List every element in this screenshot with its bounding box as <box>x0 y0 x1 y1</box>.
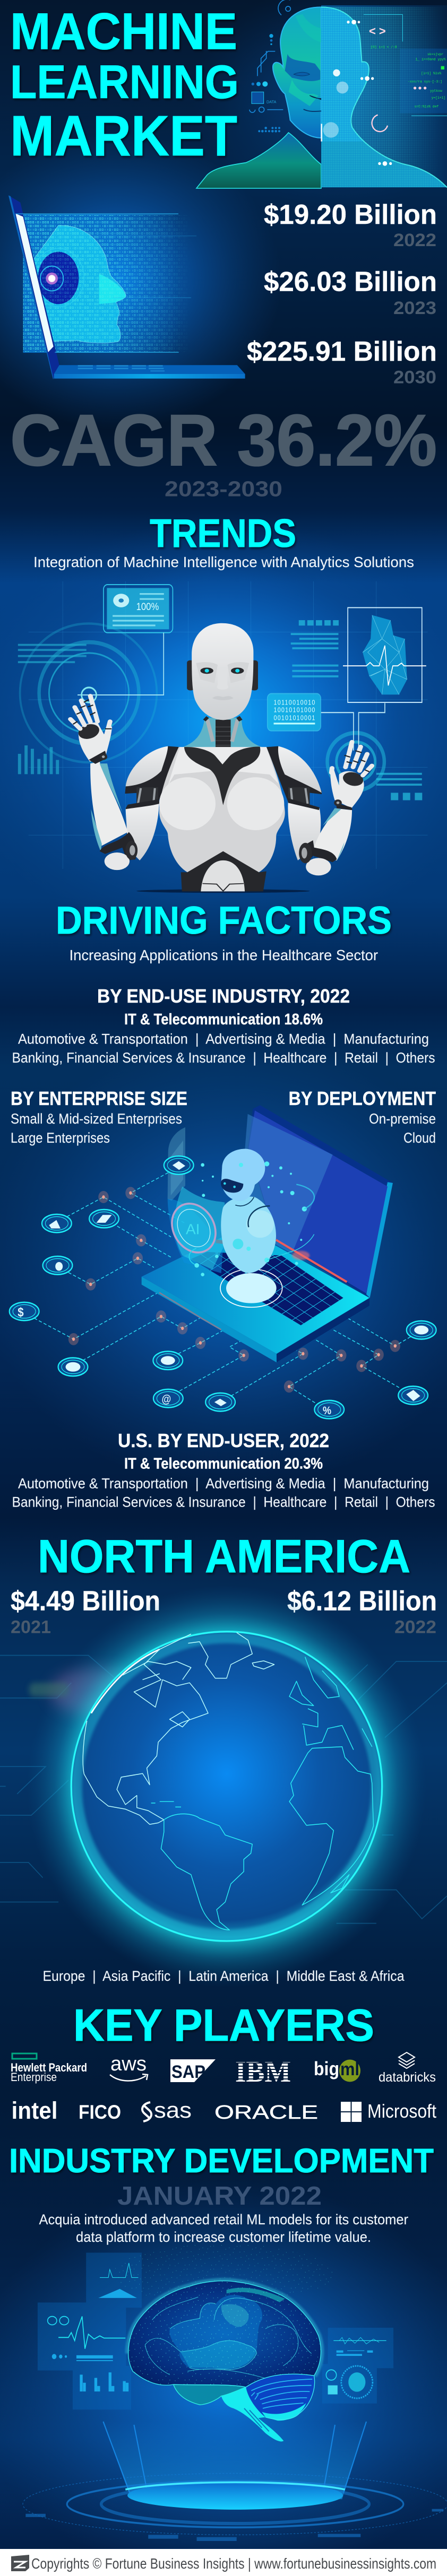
illustration: half human half digital head: < > <box>369 24 386 38</box>
platform <box>23 2473 447 2541</box>
illustration: half human half digital head: [0] i+1 < /:8 <box>371 45 397 49</box>
logo: IBM: IBM <box>235 2056 291 2088</box>
logo: Microsoft <box>341 2100 436 2122</box>
illustration: humanoid robot <box>71 623 372 893</box>
leading segment: IT & Telecommunication 20.3% <box>124 1456 323 1473</box>
line 2: data platform to increase customer lifetime value. <box>76 2229 371 2245</box>
robot arm right <box>288 742 372 875</box>
illustration: laptop with digital face <box>8 195 245 379</box>
development date: JANUARY 2022 <box>117 2182 322 2211</box>
logo: Hewlett Packard Enterprise: Enterprise <box>11 2070 57 2084</box>
value: $225.91 Billion <box>247 336 437 367</box>
illustration: half human half digital head: yytkxw <box>430 89 442 93</box>
leading segment: IT & Telecommunication 18.6% <box>124 1011 323 1028</box>
illustration: half human half digital head: y=[i+1] <box>432 96 445 100</box>
segments line 1: Automotive & Transportation | Advertising & Media | Manufacturing <box>18 1476 429 1492</box>
logo: Hewlett Packard Enterprise: Hewlett Packard <box>11 2061 87 2074</box>
network icons: @ <box>161 1393 171 1406</box>
laptop screen <box>239 1105 393 1298</box>
logo: Databricks: databricks <box>379 2070 436 2085</box>
footer logo <box>11 2555 29 2571</box>
subheading: BY ENTERPRISE SIZE <box>11 1087 187 1109</box>
segment 2: Cloud <box>403 1130 436 1146</box>
CAGR figure: CAGR 36.2% <box>10 400 437 481</box>
value: $6.12 Billion <box>287 1586 437 1617</box>
heading: North America: NORTH AMERICA <box>38 1530 410 1582</box>
segment 2: Large Enterprises <box>11 1130 110 1146</box>
stat: 2022 market size <box>264 199 437 250</box>
logo: Intel: intel <box>12 2097 57 2124</box>
cerebellum <box>246 2374 315 2421</box>
robot torso <box>159 747 285 891</box>
illustration: isometric laptop with AI robot <box>142 1105 393 1362</box>
subheading: U.S. BY END-USER, 2022 <box>118 1430 329 1451</box>
network icons: % <box>323 1405 331 1417</box>
laptop base <box>142 1227 369 1362</box>
logo: Microsoft: Microsoft <box>367 2100 436 2122</box>
block: U.S. by end-user <box>12 1430 435 1510</box>
driving factors text: Increasing Applications in the Healthcare Sector <box>69 947 378 963</box>
logo: BigML: ml <box>340 2059 359 2079</box>
value: $19.20 Billion <box>264 199 437 230</box>
illustration: holographic brain <box>113 2244 333 2441</box>
CAGR period: 2023-2030 <box>165 476 282 501</box>
heading: key players: KEY PLAYERS <box>73 2000 374 2051</box>
title line 1: MACHINE <box>10 2 237 60</box>
illustration: hologram projector and data panels <box>23 2252 447 2541</box>
block: by deployment <box>289 1087 436 1146</box>
value: $4.49 Billion <box>11 1586 160 1617</box>
logo: AWS: aws <box>110 2053 147 2075</box>
face <box>32 225 126 343</box>
logo: FICO: FICO <box>79 2101 121 2123</box>
subheading: BY END-USE INDUSTRY, 2022 <box>97 985 350 1007</box>
other regions: Europe | Asia Pacific | Latin America | Middle East & Africa <box>42 1968 405 1984</box>
year: 2023 <box>393 298 436 318</box>
logo: SAP: SAP <box>171 2062 205 2082</box>
segments line 1: Automotive & Transportation | Advertising & Media | Manufacturing <box>18 1031 429 1047</box>
logo: SAS: sas <box>154 2098 192 2122</box>
line 1: Acquia introduced advanced retail ML models for its customer <box>39 2212 408 2227</box>
robot head <box>187 623 258 720</box>
stat: 2021 regional value <box>11 1586 160 1637</box>
hologram robot <box>194 1149 314 1307</box>
illustration: half human half digital head: s=C:%1s% def <box>415 105 439 109</box>
title <box>10 2 239 168</box>
data panels <box>38 2252 393 2409</box>
illustration: half human half digital head: DATA <box>267 99 277 104</box>
logo: Hewlett Packard Enterprise <box>11 2053 87 2084</box>
illustration: half human half digital head <box>196 0 447 188</box>
illustration: globe <box>27 1586 426 1987</box>
development text <box>39 2212 408 2245</box>
illustration: half human half digital head: 1_ i>=Oand ypy% <box>416 58 446 62</box>
beam <box>103 2422 366 2499</box>
continents <box>83 1632 373 1930</box>
block: by enterprise size <box>11 1087 187 1146</box>
network lines and nodes <box>34 1173 410 1403</box>
hologram panel: AI <box>186 1221 200 1238</box>
HUD elements behind robot: 10010101000 <box>274 707 315 714</box>
stat: 2030 market size <box>247 336 437 387</box>
year: 2022 <box>394 1617 436 1637</box>
hologram panel <box>164 1127 253 1273</box>
HUD elements behind robot <box>18 581 428 869</box>
title line 3: MARKET <box>10 103 237 168</box>
logo: BigML: big <box>314 2058 339 2079</box>
title line 2: LEARNING <box>10 55 239 108</box>
block: by end-use industry <box>12 985 435 1066</box>
footer <box>0 2549 447 2576</box>
segment 1: Small & Mid-sized Enterprises <box>11 1111 182 1127</box>
trends text: Integration of Machine Intelligence with Analytics Solutions <box>33 554 414 570</box>
year: 2030 <box>393 367 436 387</box>
HUD elements behind robot: 10110010010 <box>274 699 315 707</box>
year: 2022 <box>393 230 436 250</box>
robot neck <box>183 718 262 765</box>
temporal lobe and stem <box>174 2384 246 2405</box>
robot shadow <box>136 889 310 893</box>
heading: trends: TRENDS <box>150 511 296 555</box>
logo: Oracle: ORACLE <box>214 2101 318 2123</box>
HUD elements behind robot: 100% <box>136 601 159 612</box>
segment 1: On-premise <box>369 1111 436 1127</box>
illustration: half human half digital head: [i+1] %1s% <box>421 72 441 75</box>
stat: 2022 regional value <box>287 1586 437 1637</box>
logo: BigML <box>314 2058 360 2082</box>
network icons: $ <box>18 1305 24 1319</box>
year: 2021 <box>11 1617 51 1637</box>
cerebrum <box>128 2281 321 2387</box>
robot shoulders <box>125 746 322 805</box>
illustration: circuit lines behind globe <box>0 1656 447 1924</box>
value: $26.03 Billion <box>264 266 437 297</box>
HUD elements behind robot: 00101010001 <box>274 714 315 722</box>
robot arm left <box>71 696 159 870</box>
illustration: half human half digital head: -xxs/ra sys-[-3:] <box>408 80 442 84</box>
illustration: half human half digital head: sk=sjvpr <box>427 53 444 56</box>
network icons <box>10 1156 436 1418</box>
heading: driving factors: DRIVING FACTORS <box>56 899 392 942</box>
stat: 2023 market size <box>264 266 437 318</box>
heading: industry development: INDUSTRY DEVELOPMENT <box>9 2142 434 2180</box>
logo: Databricks <box>379 2052 436 2085</box>
